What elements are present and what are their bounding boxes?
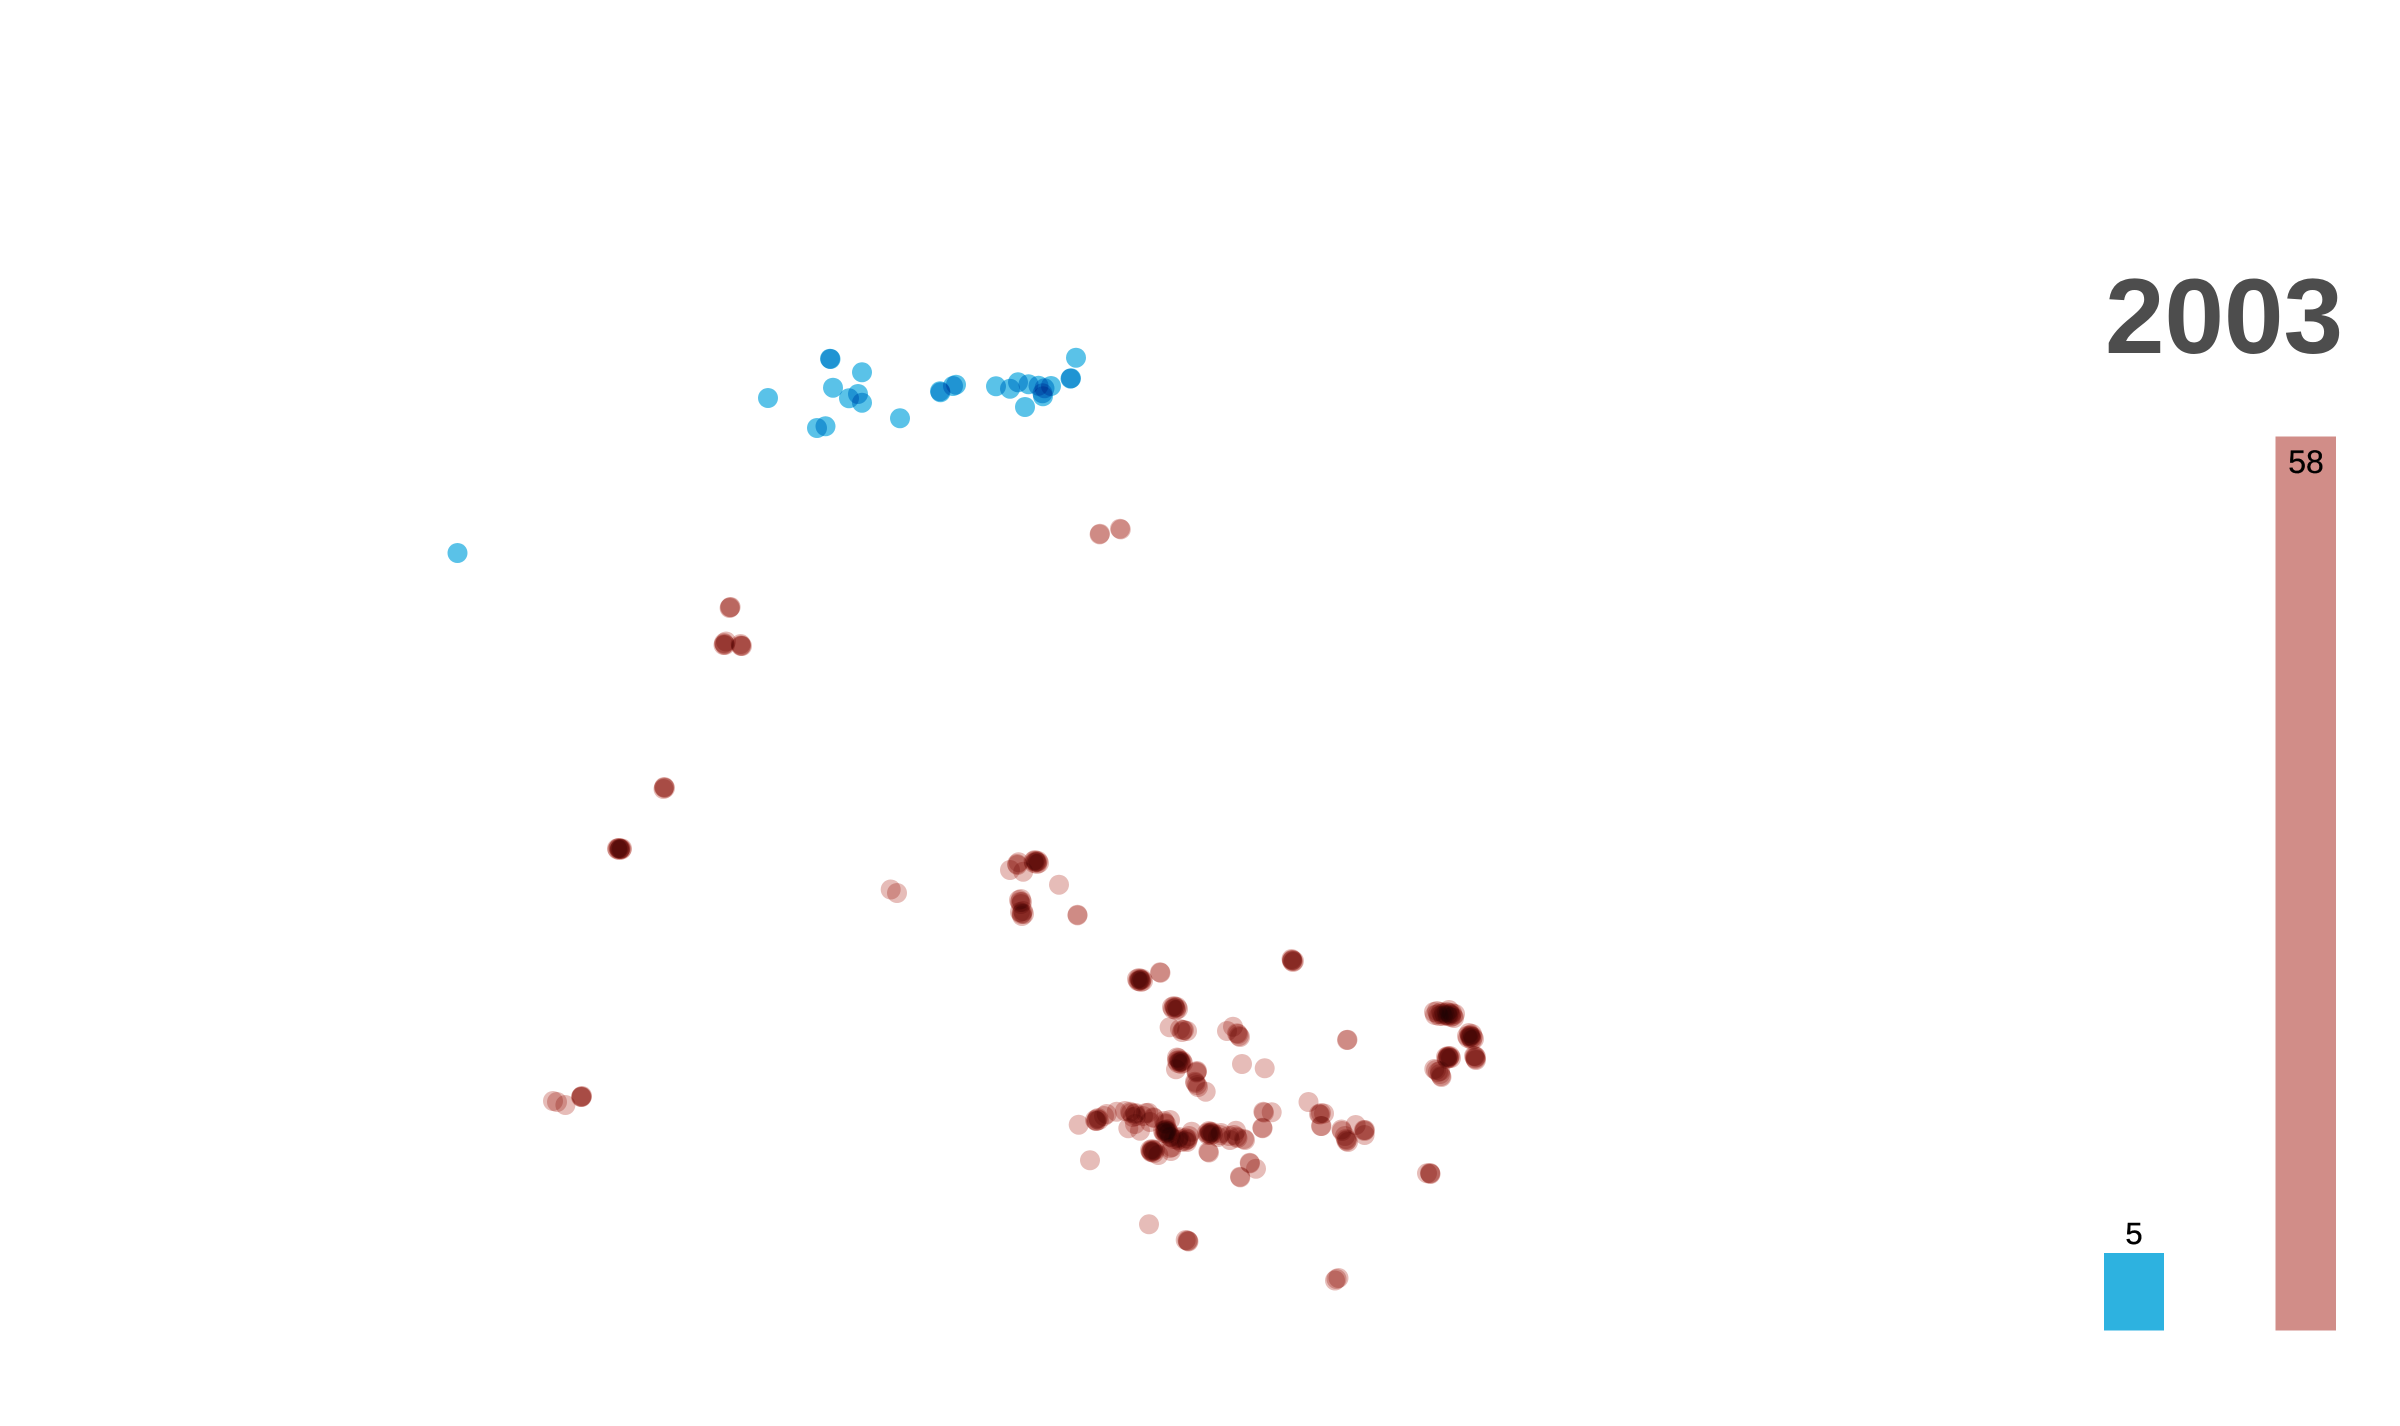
scatter: red dots bbox=[543, 519, 1486, 1290]
red bar value: 58 bbox=[2288, 444, 2324, 480]
bar: red bbox=[2276, 436, 2336, 1330]
year title: 2003 bbox=[2105, 256, 2343, 376]
bar: blue bbox=[2104, 1216, 2164, 1330]
blue bar value: 5 bbox=[2125, 1216, 2143, 1251]
scatter: blue dots bbox=[448, 348, 1086, 563]
